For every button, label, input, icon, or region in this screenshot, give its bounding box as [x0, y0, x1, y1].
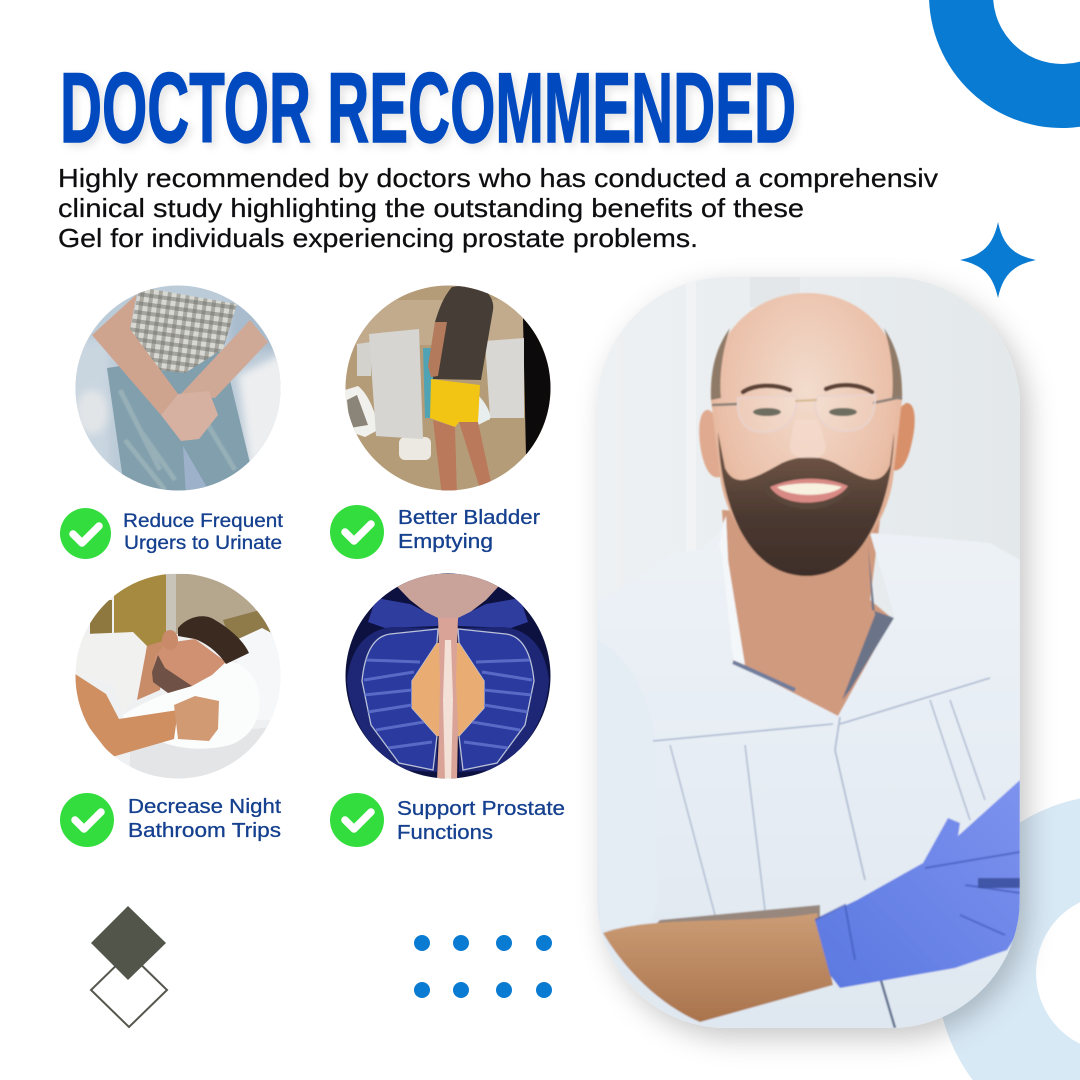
head: face: [710, 292, 903, 538]
face: [152, 639, 226, 693]
icon: four-point star: [960, 222, 1036, 298]
plaid shirt: [130, 287, 237, 373]
label: [397, 798, 565, 844]
label: Bathroom Trips: [128, 820, 281, 842]
check icon: [330, 505, 384, 559]
photo: man sleeping: [70, 570, 285, 785]
orange glands: [412, 643, 484, 736]
arm: [603, 913, 833, 1022]
intro text block: [58, 163, 938, 253]
check icon: [60, 793, 114, 847]
label: Support Prostate: [397, 798, 565, 820]
t-shirt: [90, 632, 147, 652]
urethra: [437, 618, 458, 780]
label: [123, 511, 284, 554]
blue glove: [815, 780, 1020, 988]
left lobes: [347, 598, 438, 772]
label: Reduce Frequent: [123, 511, 284, 532]
label: [128, 796, 281, 842]
jeans: [107, 351, 250, 498]
decorative ring: top right: [929, 0, 1080, 128]
decorative ring: bottom right: [937, 798, 1080, 1080]
label: Emptying: [398, 531, 493, 553]
beard: [718, 432, 894, 576]
intro text block: Gel for individuals experiencing prostate problems.: [58, 223, 698, 253]
check icon: [60, 508, 111, 559]
benefit 2: [330, 505, 540, 559]
intro text block: clinical study highlighting the outstanding benefits of these: [58, 193, 804, 223]
photo: man holding groin: [76, 286, 280, 490]
decorative diamonds: [91, 906, 167, 1027]
intro text block: Highly recommended by doctors who has conducted a comprehensiv: [58, 163, 938, 193]
glasses: [712, 397, 902, 405]
label: Decrease Night: [128, 796, 281, 818]
benefit 4: [330, 793, 565, 847]
label: [398, 507, 540, 553]
arm: [72, 672, 178, 757]
collar trim: [842, 545, 894, 700]
label: Urgers to Urinate: [124, 533, 282, 554]
benefit 3: [60, 793, 281, 847]
label: Better Bladder: [398, 507, 540, 529]
nose: [790, 427, 825, 459]
neck: [722, 510, 894, 716]
mouth: [770, 479, 848, 503]
arms and hands: [92, 294, 178, 415]
eyes: [753, 408, 781, 416]
shirt shading: [597, 640, 658, 930]
brows: [743, 385, 872, 392]
decorative dots: [414, 935, 552, 998]
illustration: prostate anatomy: [340, 570, 555, 785]
neck: [137, 641, 164, 700]
hair: [178, 616, 249, 664]
head: ears: [699, 410, 722, 477]
panel: doctor photo: [597, 277, 1020, 1028]
check icon: [330, 793, 384, 847]
benefit 1: [60, 508, 284, 559]
collar left: [726, 520, 746, 666]
label: Functions: [397, 822, 493, 844]
photo: man at urinal: [340, 280, 555, 496]
right lobes: [458, 598, 549, 772]
hand: [174, 696, 219, 741]
pillow: [122, 662, 260, 749]
shirt: [597, 516, 1020, 1028]
